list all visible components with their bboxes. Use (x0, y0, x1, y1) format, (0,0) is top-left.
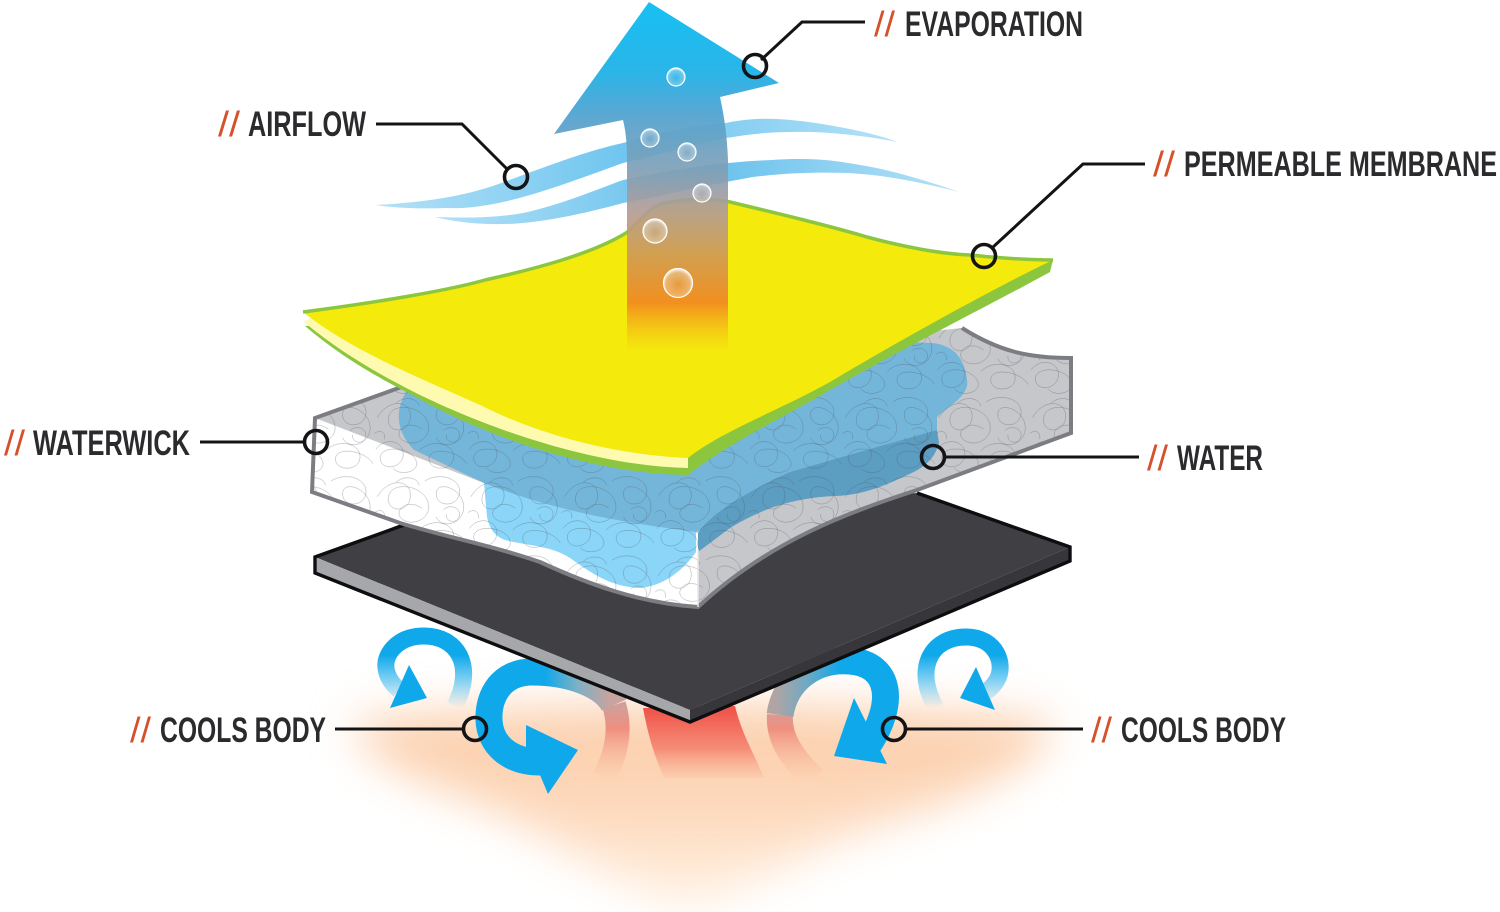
panel: permeable membrane layer (303, 199, 1053, 475)
label: cools body right: COOLS BODY (1121, 711, 1286, 750)
water: top patch (399, 330, 967, 532)
label: waterwick (4, 424, 328, 463)
label: airflow (218, 105, 528, 188)
label: water (922, 439, 1263, 478)
label: cools body left: // (130, 711, 151, 750)
label: waterwick: // (4, 424, 25, 463)
label: water: // (1147, 439, 1168, 478)
label: airflow: AIRFLOW (248, 105, 366, 144)
icon: large right swirl arrow (780, 661, 887, 780)
icon: airflow waves (376, 119, 959, 224)
icon: large left swirl arrow (489, 672, 618, 794)
label: airflow: // (218, 105, 240, 144)
panel: waterwick layer (300, 320, 1080, 620)
icon: small left swirl arrow (386, 636, 464, 708)
heat streams (643, 706, 764, 778)
heat glow (352, 706, 1056, 905)
label: evaporation (744, 5, 1083, 78)
water bubbles (641, 68, 711, 298)
panel: dark base layer (315, 493, 1070, 722)
label: waterwick: WATERWICK (33, 424, 190, 463)
label: cools body right (882, 711, 1286, 750)
label: permeable membrane (972, 145, 1497, 268)
label: evaporation: EVAPORATION (905, 5, 1083, 44)
fiber texture (314, 328, 1069, 604)
label: water: WATER (1177, 439, 1263, 478)
label: permeable membrane: // (1153, 145, 1175, 184)
icon: evaporation arrow (554, 2, 779, 352)
label: cools body left: COOLS BODY (160, 711, 326, 750)
label: evaporation: // (874, 5, 895, 44)
icon: small right swirl arrow (926, 637, 1000, 710)
water: side patch (698, 430, 939, 552)
water: front light patch (484, 483, 696, 588)
label: cools body left (130, 711, 486, 750)
label: cools body right: // (1091, 711, 1112, 750)
